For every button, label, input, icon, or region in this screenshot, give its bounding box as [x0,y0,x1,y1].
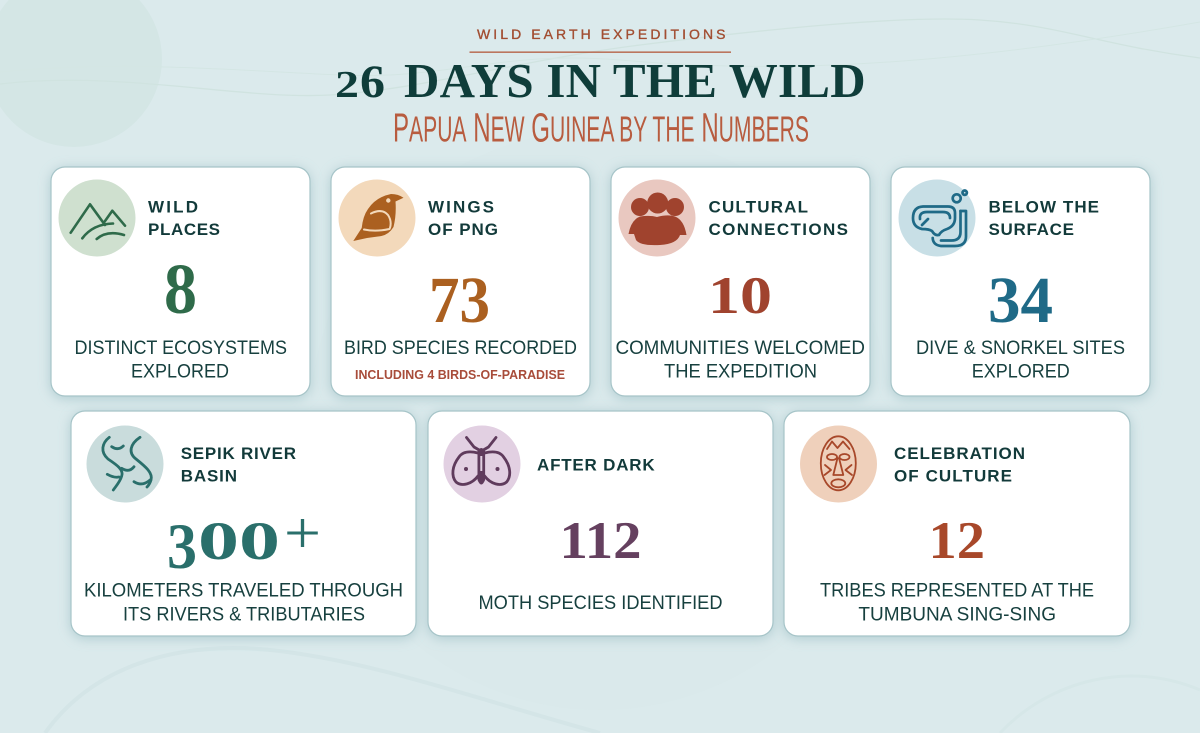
icon: tribal mask [800,426,877,502]
heading: CELEBRATION [894,444,1025,463]
title: 2 [335,64,359,106]
panel: below the surface [891,167,1150,396]
description [820,581,1094,626]
icon: snorkel mask [898,180,976,256]
description: COMMUNITIES WELCOMED [616,338,865,359]
heading: BASIN [181,467,237,486]
icon: people [618,180,696,256]
heading: PLACES [148,220,220,239]
number: 73 [429,264,490,337]
heading: WILD [148,198,198,217]
heading: SURFACE [988,220,1074,239]
description: BIRD SPECIES RECORDED [344,338,577,359]
description: ITS RIVERS & TRIBUTARIES [123,605,365,626]
number: 8 [164,249,197,329]
heading: WINGS [428,198,494,217]
description: DISTINCT ECOSYSTEMS [74,338,287,359]
heading [181,444,296,486]
description [616,338,865,383]
note: INCLUDING 4 BIRDS-OF-PARADISE [355,367,565,382]
description: MOTH SPECIES IDENTIFIED [478,593,722,614]
number: 3 [167,511,197,583]
panel: wild places [51,167,310,396]
heading: BELOW THE [988,198,1099,217]
description: KILOMETERS TRAVELED THROUGH [84,581,403,602]
description: EXPLORED [972,362,1070,383]
number: 112 [560,512,642,570]
heading: CONNECTIONS [708,220,848,239]
panel: sepik river basin [71,411,416,636]
icon: mountains [58,180,136,256]
description: TUMBUNA SING-SING [858,605,1056,626]
icon: moth [444,426,520,502]
number: 10 [708,267,772,325]
heading [988,198,1099,239]
description [74,338,287,383]
panel: celebration of culture [784,411,1130,636]
header [335,26,866,150]
subtitle: PAPUA NEW GUINEA BY THE NUMBERS [393,104,809,150]
description [84,581,403,626]
number: 34 [988,264,1053,337]
heading [428,198,498,239]
number [167,500,321,583]
panel: wings of png [331,167,590,396]
title: 6 [360,56,385,108]
title: DAYS IN THE WILD [404,53,866,108]
description: THE EXPEDITION [664,362,817,383]
heading [708,198,848,239]
number: 12 [928,512,985,570]
icon: bird [338,180,416,256]
number: + [284,500,321,566]
description: EXPLORED [131,362,229,383]
heading: OF PNG [428,220,498,239]
number: 00 [198,511,280,571]
heading: CULTURAL [708,198,808,217]
description: DIVE & SNORKEL SITES [916,338,1125,359]
heading: OF CULTURE [894,467,1012,486]
heading: AFTER DARK [537,456,655,475]
heading: SEPIK RIVER [181,444,296,463]
heading [894,444,1025,486]
eyebrow: WILD EARTH EXPEDITIONS [477,26,726,42]
panel: after dark [428,411,773,636]
description: TRIBES REPRESENTED AT THE [820,581,1094,602]
heading [148,198,220,239]
icon: river [86,426,164,502]
panel: cultural connections [611,167,870,396]
description [916,338,1125,383]
